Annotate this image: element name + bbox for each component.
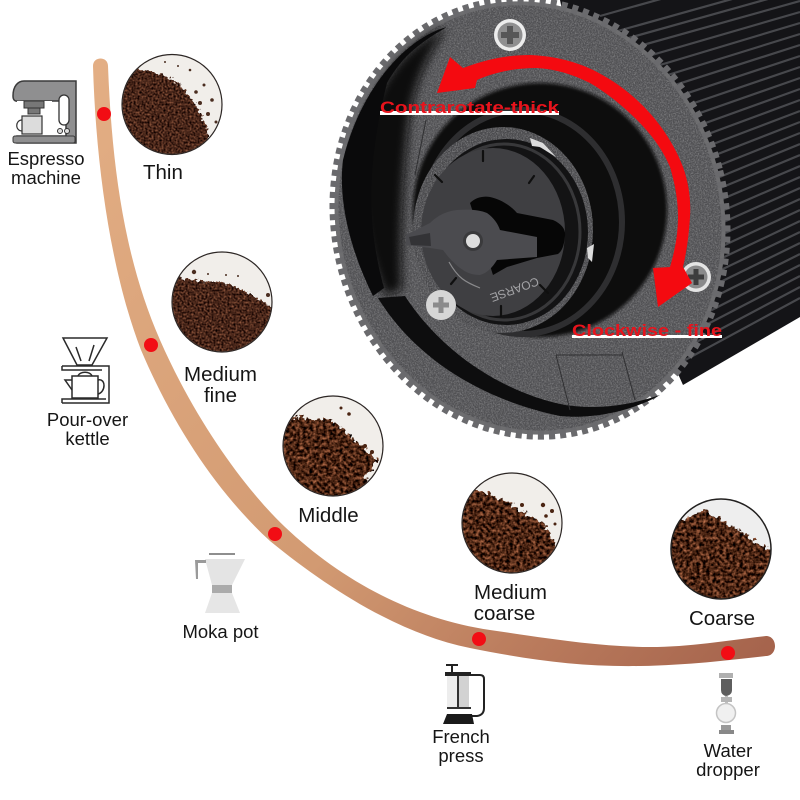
soft shading beside crescent — [360, 30, 445, 296]
outer black hub recess — [413, 83, 667, 337]
label: clockwise fine: Clockwise - fine — [572, 322, 722, 340]
black recess crescent — [342, 27, 447, 296]
red double arrow — [437, 55, 692, 307]
icon: moka pot — [195, 553, 245, 613]
label: water dropper: Water — [704, 740, 752, 761]
grey face plate — [294, 0, 766, 472]
red marker: thin — [97, 107, 111, 121]
red marker: medium fine — [144, 338, 158, 352]
grounds sample: medium fine — [171, 251, 273, 353]
dial COARSE text: COARSE — [488, 274, 541, 305]
label: french press: press — [438, 745, 484, 766]
coarseness dial — [421, 148, 565, 316]
screw right — [681, 262, 711, 292]
screw top — [494, 19, 526, 51]
dial arrow — [449, 262, 480, 288]
label: pour-over kettle: kettle — [65, 428, 110, 449]
toothed gear ring — [289, 0, 771, 476]
label: contrarotate-thick: Contrarotate-thick — [380, 99, 560, 117]
grinder photo illustration — [330, 0, 800, 440]
label: medium coarse: Medium — [474, 581, 547, 604]
icon: espresso machine — [13, 81, 76, 143]
icon: pour-over kettle — [62, 338, 109, 403]
label: middle: Middle — [298, 504, 359, 527]
icon: water dropper — [716, 673, 736, 734]
knob centre screw — [463, 231, 483, 251]
knob handle — [406, 197, 565, 275]
label: medium fine: Medium — [184, 363, 257, 386]
grounds sample: medium coarse — [461, 472, 563, 574]
hub grey ring — [413, 127, 593, 333]
label: moka pot: Moka pot — [182, 621, 259, 642]
grind scale curve — [93, 58, 775, 666]
label: medium coarse: coarse — [474, 602, 535, 625]
lower black strip — [378, 296, 660, 417]
grounds sample: thin — [121, 54, 223, 156]
screw left — [426, 290, 456, 320]
grounds sample: middle — [280, 394, 386, 500]
faint moulding lines — [415, 120, 635, 410]
grounds sample: coarse — [670, 498, 772, 600]
label: espresso machine: Espresso — [7, 148, 85, 169]
red marker: middle — [268, 527, 282, 541]
label: coarse: Coarse — [689, 607, 755, 630]
red marker: medium coarse — [472, 632, 486, 646]
icon: french press — [443, 664, 484, 724]
ribbed grinder body — [560, 0, 800, 385]
label: medium fine: fine — [204, 384, 237, 407]
label: thin: Thin — [143, 161, 183, 184]
red marker: coarse — [721, 646, 735, 660]
label: water dropper: dropper — [696, 759, 760, 780]
label: pour-over kettle: Pour-over — [47, 409, 128, 430]
label: espresso machine: machine — [11, 167, 81, 188]
white chips in the hub — [530, 138, 556, 157]
label: french press: French — [432, 726, 490, 747]
